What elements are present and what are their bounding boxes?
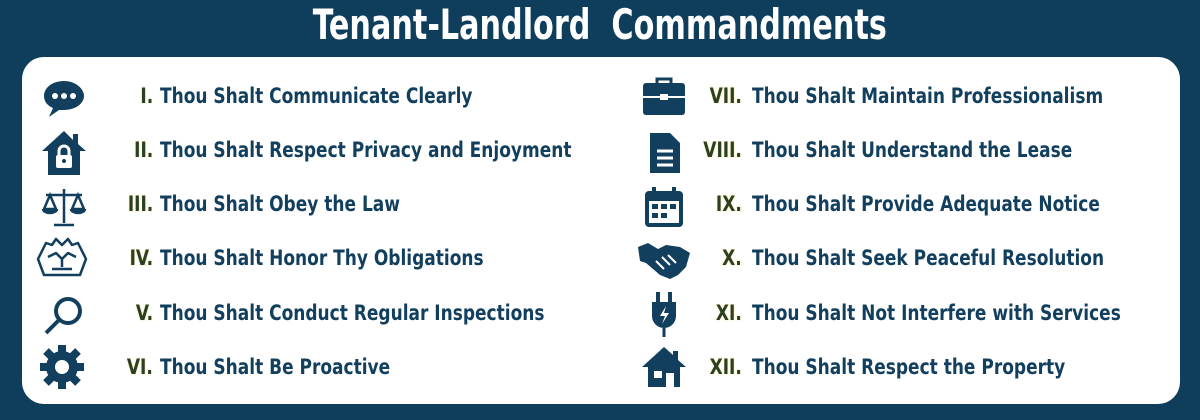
icon: plug: [652, 292, 676, 337]
item VIII: Thou Shalt Understand the Lease: [752, 138, 1072, 162]
item I: Thou Shalt Communicate Clearly: [160, 84, 472, 108]
item VII: VII.: [710, 84, 742, 108]
item VI: VI.: [127, 355, 153, 379]
item II: Thou Shalt Respect Privacy and Enjoyment: [160, 138, 571, 162]
icon: speech bubble: [44, 81, 84, 117]
item V: Thou Shalt Conduct Regular Inspections: [160, 301, 544, 325]
item VII: Thou Shalt Maintain Professionalism: [752, 84, 1103, 108]
item X: Thou Shalt Seek Peaceful Resolution: [752, 246, 1104, 270]
item XI: XI.: [716, 301, 742, 325]
icon: magnifier: [44, 297, 82, 334]
item VI: Thou Shalt Be Proactive: [160, 355, 390, 379]
panel: commandments: [22, 57, 1180, 404]
item IV: Thou Shalt Honor Thy Obligations: [160, 246, 484, 270]
item III: III.: [128, 192, 153, 216]
icon: gear: [40, 345, 84, 389]
icon: house: [642, 347, 686, 387]
item I: I.: [140, 84, 153, 108]
icon: house lock: [42, 131, 86, 175]
item IX: Thou Shalt Provide Adequate Notice: [752, 192, 1100, 216]
item III: Thou Shalt Obey the Law: [160, 192, 400, 216]
item XII: Thou Shalt Respect the Property: [752, 355, 1065, 379]
item XII: XII.: [710, 355, 742, 379]
item VIII: VIII.: [703, 138, 742, 162]
title: Tenant-Landlord Commandments: [313, 0, 887, 49]
icon: pinky promise: [36, 238, 88, 276]
icon: scales: [42, 189, 86, 226]
icon: document: [650, 133, 680, 173]
item IX: IX.: [716, 192, 742, 216]
icon: calendar: [645, 187, 683, 227]
icon: handshake: [638, 243, 690, 279]
item II: II.: [134, 138, 153, 162]
item XI: Thou Shalt Not Interfere with Services: [752, 301, 1121, 325]
item IV: IV.: [129, 246, 153, 270]
icon: briefcase: [643, 78, 685, 115]
item V: V.: [136, 301, 153, 325]
item X: X.: [722, 246, 742, 270]
